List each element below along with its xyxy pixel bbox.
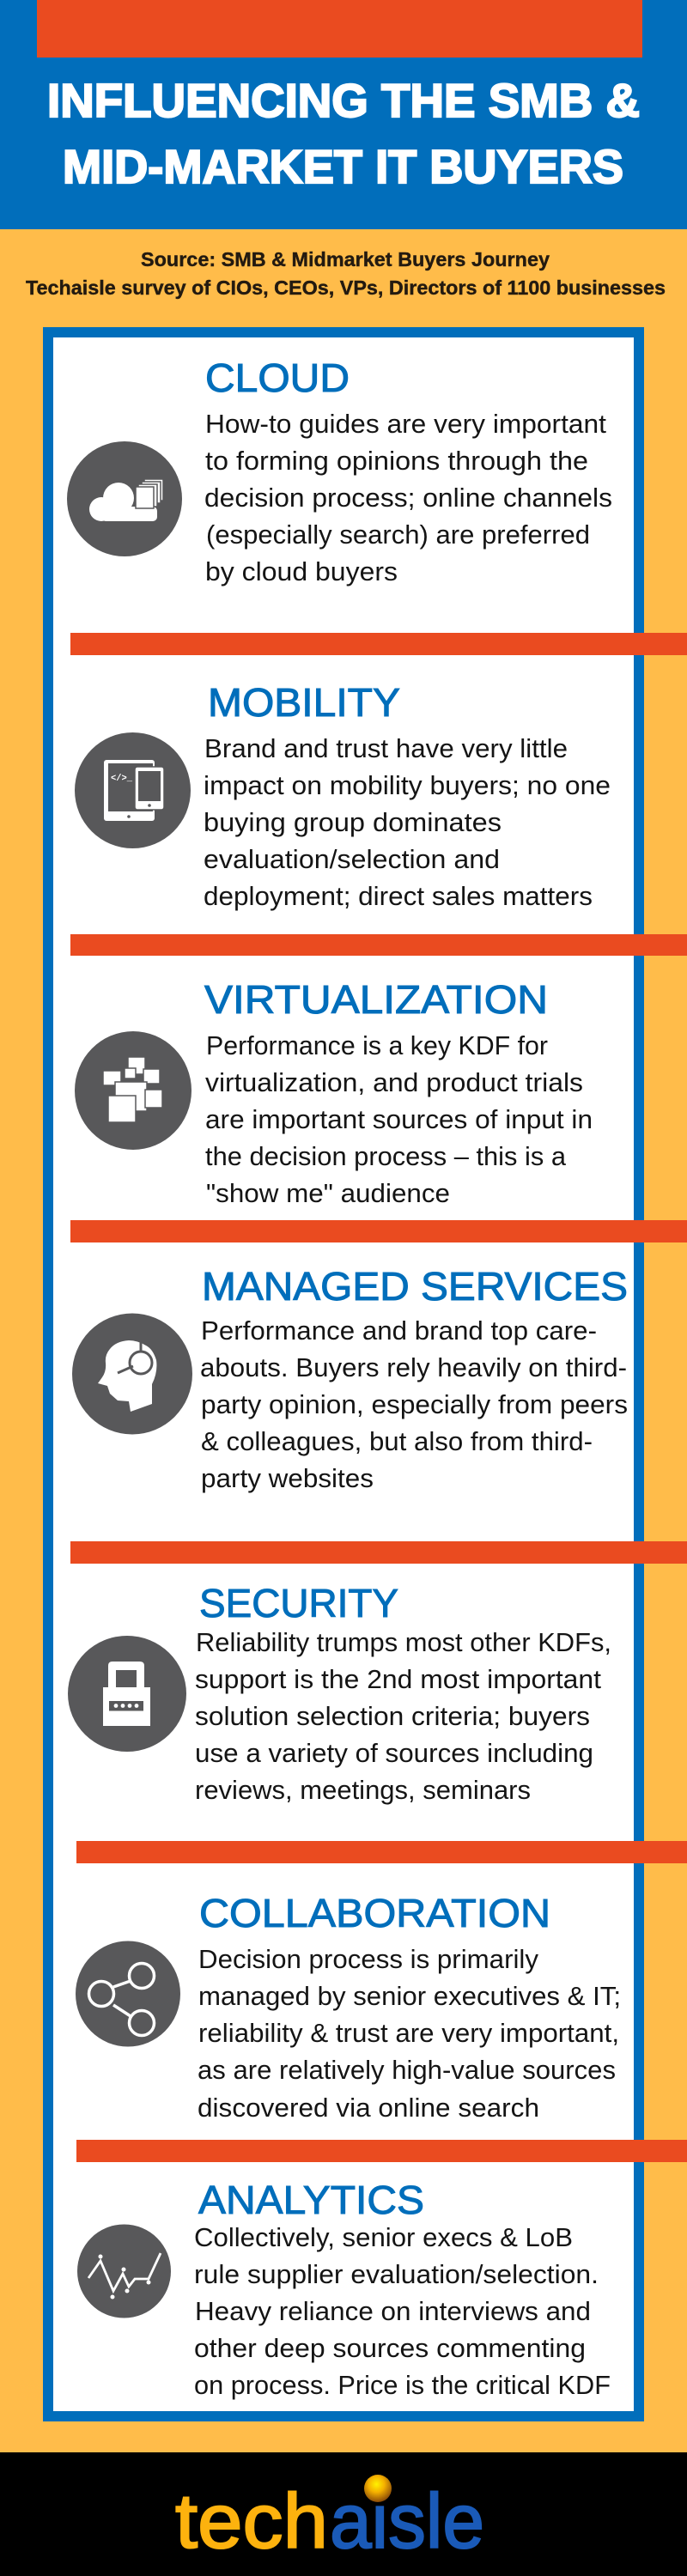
divider bar 3 <box>70 1220 687 1242</box>
text: virtualization: Performance is a key KDF for <box>206 1030 548 1060</box>
text: collaboration: reliability & trust are very important, <box>198 2018 619 2048</box>
title: MID-MARKET IT BUYERS <box>63 140 623 193</box>
text: cloud: to forming opinions through the <box>205 446 588 476</box>
panel: managed services <box>72 1264 628 1493</box>
icon: head with headset <box>72 1314 192 1434</box>
text: cloud <box>204 409 612 586</box>
panel: virtualization <box>75 977 593 1208</box>
icon: stacked squares <box>75 1031 192 1150</box>
heading: virtualization: VIRTUALIZATION <box>204 977 548 1022</box>
panel: cloud <box>67 355 612 586</box>
panel: mobility <box>75 680 611 911</box>
text: analytics: Heavy reliance on interviews and <box>195 2296 591 2326</box>
text: virtualization: "show me" audience <box>206 1178 450 1208</box>
text: analytics: Collectively, senior execs & LoB <box>194 2222 573 2252</box>
title <box>47 74 640 193</box>
text: virtualization: are important sources of input in <box>205 1104 593 1134</box>
logo wordmark: techaisle: aisle <box>330 2479 484 2565</box>
title: INFLUENCING THE SMB & <box>47 74 640 127</box>
panel: collaboration <box>76 1891 621 2123</box>
text: virtualization: the decision process – this is a <box>205 1141 567 1171</box>
text: security: support is the 2nd most important <box>195 1664 601 1694</box>
text: collaboration: discovered via online search <box>198 2093 539 2123</box>
header band <box>0 0 687 229</box>
text: security <box>195 1627 611 1805</box>
text: mobility: deployment; direct sales matters <box>204 881 593 911</box>
panel: security <box>68 1581 611 1805</box>
icon: line chart <box>77 2224 171 2318</box>
icon: cloud <box>67 441 182 556</box>
text: mobility: evaluation/selection and <box>204 844 500 874</box>
text: cloud: (especially search) are preferred <box>206 519 590 550</box>
text: collaboration: Decision process is primarily <box>198 1944 538 1974</box>
text: virtualization: virtualization, and product trials <box>205 1067 583 1097</box>
main panel frame <box>48 332 639 2416</box>
text: analytics: rule supplier evaluation/selection. <box>194 2259 599 2289</box>
text: security: solution selection criteria; buyers <box>195 1701 590 1731</box>
text: security: reviews, meetings, seminars <box>195 1775 531 1805</box>
text: managed services: abouts. Buyers rely heavily on third- <box>200 1352 627 1382</box>
heading: mobility: MOBILITY <box>208 680 400 725</box>
footer band with logo <box>0 2452 687 2576</box>
text: managed services: party websites <box>201 1463 374 1493</box>
heading: analytics: ANALYTICS <box>198 2178 424 2222</box>
text: analytics: on process. Price is the critical KDF <box>194 2370 611 2400</box>
text: managed services: & colleagues, but also from third- <box>201 1426 593 1456</box>
text: virtualization <box>205 1030 593 1208</box>
text: analytics <box>194 2222 611 2400</box>
text: mobility <box>204 733 611 911</box>
text: mobility: buying group dominates <box>204 807 502 837</box>
source note: Techaisle survey of CIOs, CEOs, VPs, Directors of 1100 businesses <box>26 276 666 299</box>
divider bar 2 <box>70 934 687 956</box>
divider bar 4 <box>70 1541 687 1564</box>
icon: tablet and phone: </>_ <box>111 774 132 784</box>
panel: analytics <box>77 2178 611 2400</box>
logo wordmark: techaisle <box>175 2479 484 2565</box>
text: collaboration <box>198 1944 621 2123</box>
heading: collaboration: COLLABORATION <box>199 1891 550 1935</box>
heading: cloud: CLOUD <box>205 355 350 400</box>
text: cloud: by cloud buyers <box>205 556 398 586</box>
divider bar 5 <box>76 1841 687 1863</box>
text: security: use a variety of sources including <box>195 1738 593 1768</box>
text: cloud: How-to guides are very important <box>205 409 606 439</box>
text: cloud: decision process; online channels <box>204 483 612 513</box>
text: analytics: other deep sources commenting <box>194 2333 586 2363</box>
logo wordmark: techaisle: tech <box>175 2479 328 2565</box>
logo orb <box>364 2475 392 2502</box>
source note <box>26 248 666 299</box>
divider bar 1 <box>70 633 687 655</box>
text: security: Reliability trumps most other KDFs, <box>196 1627 611 1657</box>
heading: managed services: MANAGED SERVICES <box>202 1264 628 1309</box>
heading: security: SECURITY <box>199 1581 398 1625</box>
text: collaboration: managed by senior executives & IT; <box>198 1981 621 2011</box>
divider bar 6 <box>76 2140 687 2162</box>
text: managed services: party opinion, especially from peers <box>201 1389 628 1419</box>
text: mobility: Brand and trust have very little <box>204 733 568 763</box>
icon: share nodes <box>76 1941 180 2047</box>
text: managed services <box>200 1315 628 1493</box>
icon: tablet and phone <box>75 732 191 848</box>
icon: padlock <box>68 1636 186 1752</box>
top accent bar <box>37 0 642 58</box>
text: collaboration: as are relatively high-value sources <box>198 2055 616 2085</box>
text: mobility: impact on mobility buyers; no one <box>204 770 611 800</box>
text: managed services: Performance and brand top care- <box>201 1315 597 1346</box>
source note: Source: SMB & Midmarket Buyers Journey <box>141 248 550 270</box>
